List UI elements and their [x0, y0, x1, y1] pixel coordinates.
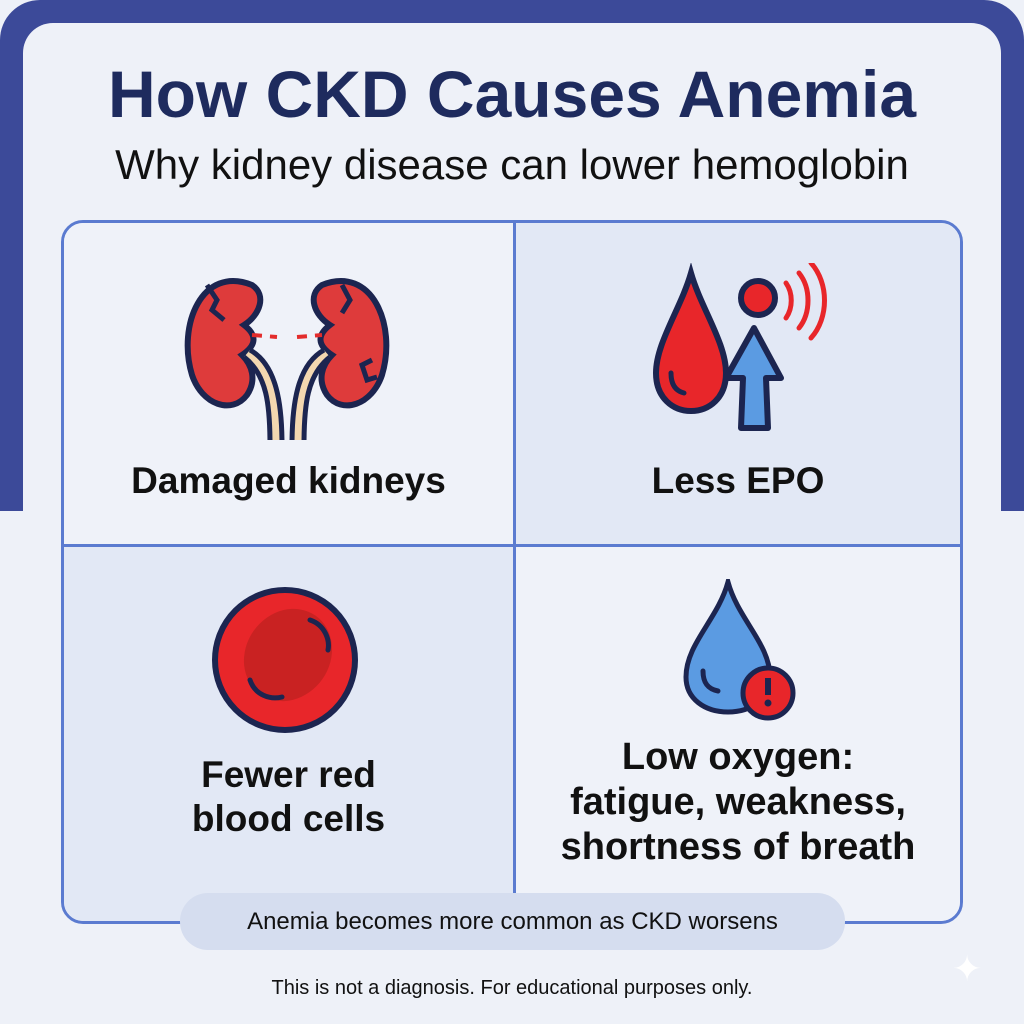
label: Less EPO — [652, 460, 824, 501]
label: Damaged kidneys — [131, 460, 446, 501]
panel: low oxygen — [516, 547, 960, 921]
callout pill: Anemia becomes more common as CKD worsens — [247, 908, 778, 935]
icon: red blood cell — [212, 587, 358, 733]
callout pill — [180, 893, 845, 950]
subtitle: Why kidney disease can lower hemoglobin — [115, 141, 909, 188]
grid — [61, 220, 963, 924]
label: fatigue, weakness, — [570, 781, 906, 823]
label: shortness of breath — [561, 826, 915, 868]
frame — [0, 0, 1024, 511]
panel: fewer red blood cells — [64, 547, 513, 921]
icon: blue drop with alert — [684, 579, 796, 720]
disclaimer: This is not a diagnosis. For educational purposes only. — [271, 977, 752, 999]
label: blood cells — [192, 798, 385, 839]
icon: sparkle: ✦ — [952, 948, 982, 989]
label — [192, 754, 385, 839]
label — [561, 736, 915, 868]
panel: less EPO — [516, 223, 960, 544]
label: Fewer red — [201, 754, 376, 795]
panel: damaged kidneys — [64, 223, 513, 544]
icon: kidneys — [184, 278, 390, 440]
label: Low oxygen: — [622, 736, 854, 778]
icon: drop with signal and arrow — [653, 263, 827, 431]
title: How CKD Causes Anemia — [108, 57, 916, 131]
